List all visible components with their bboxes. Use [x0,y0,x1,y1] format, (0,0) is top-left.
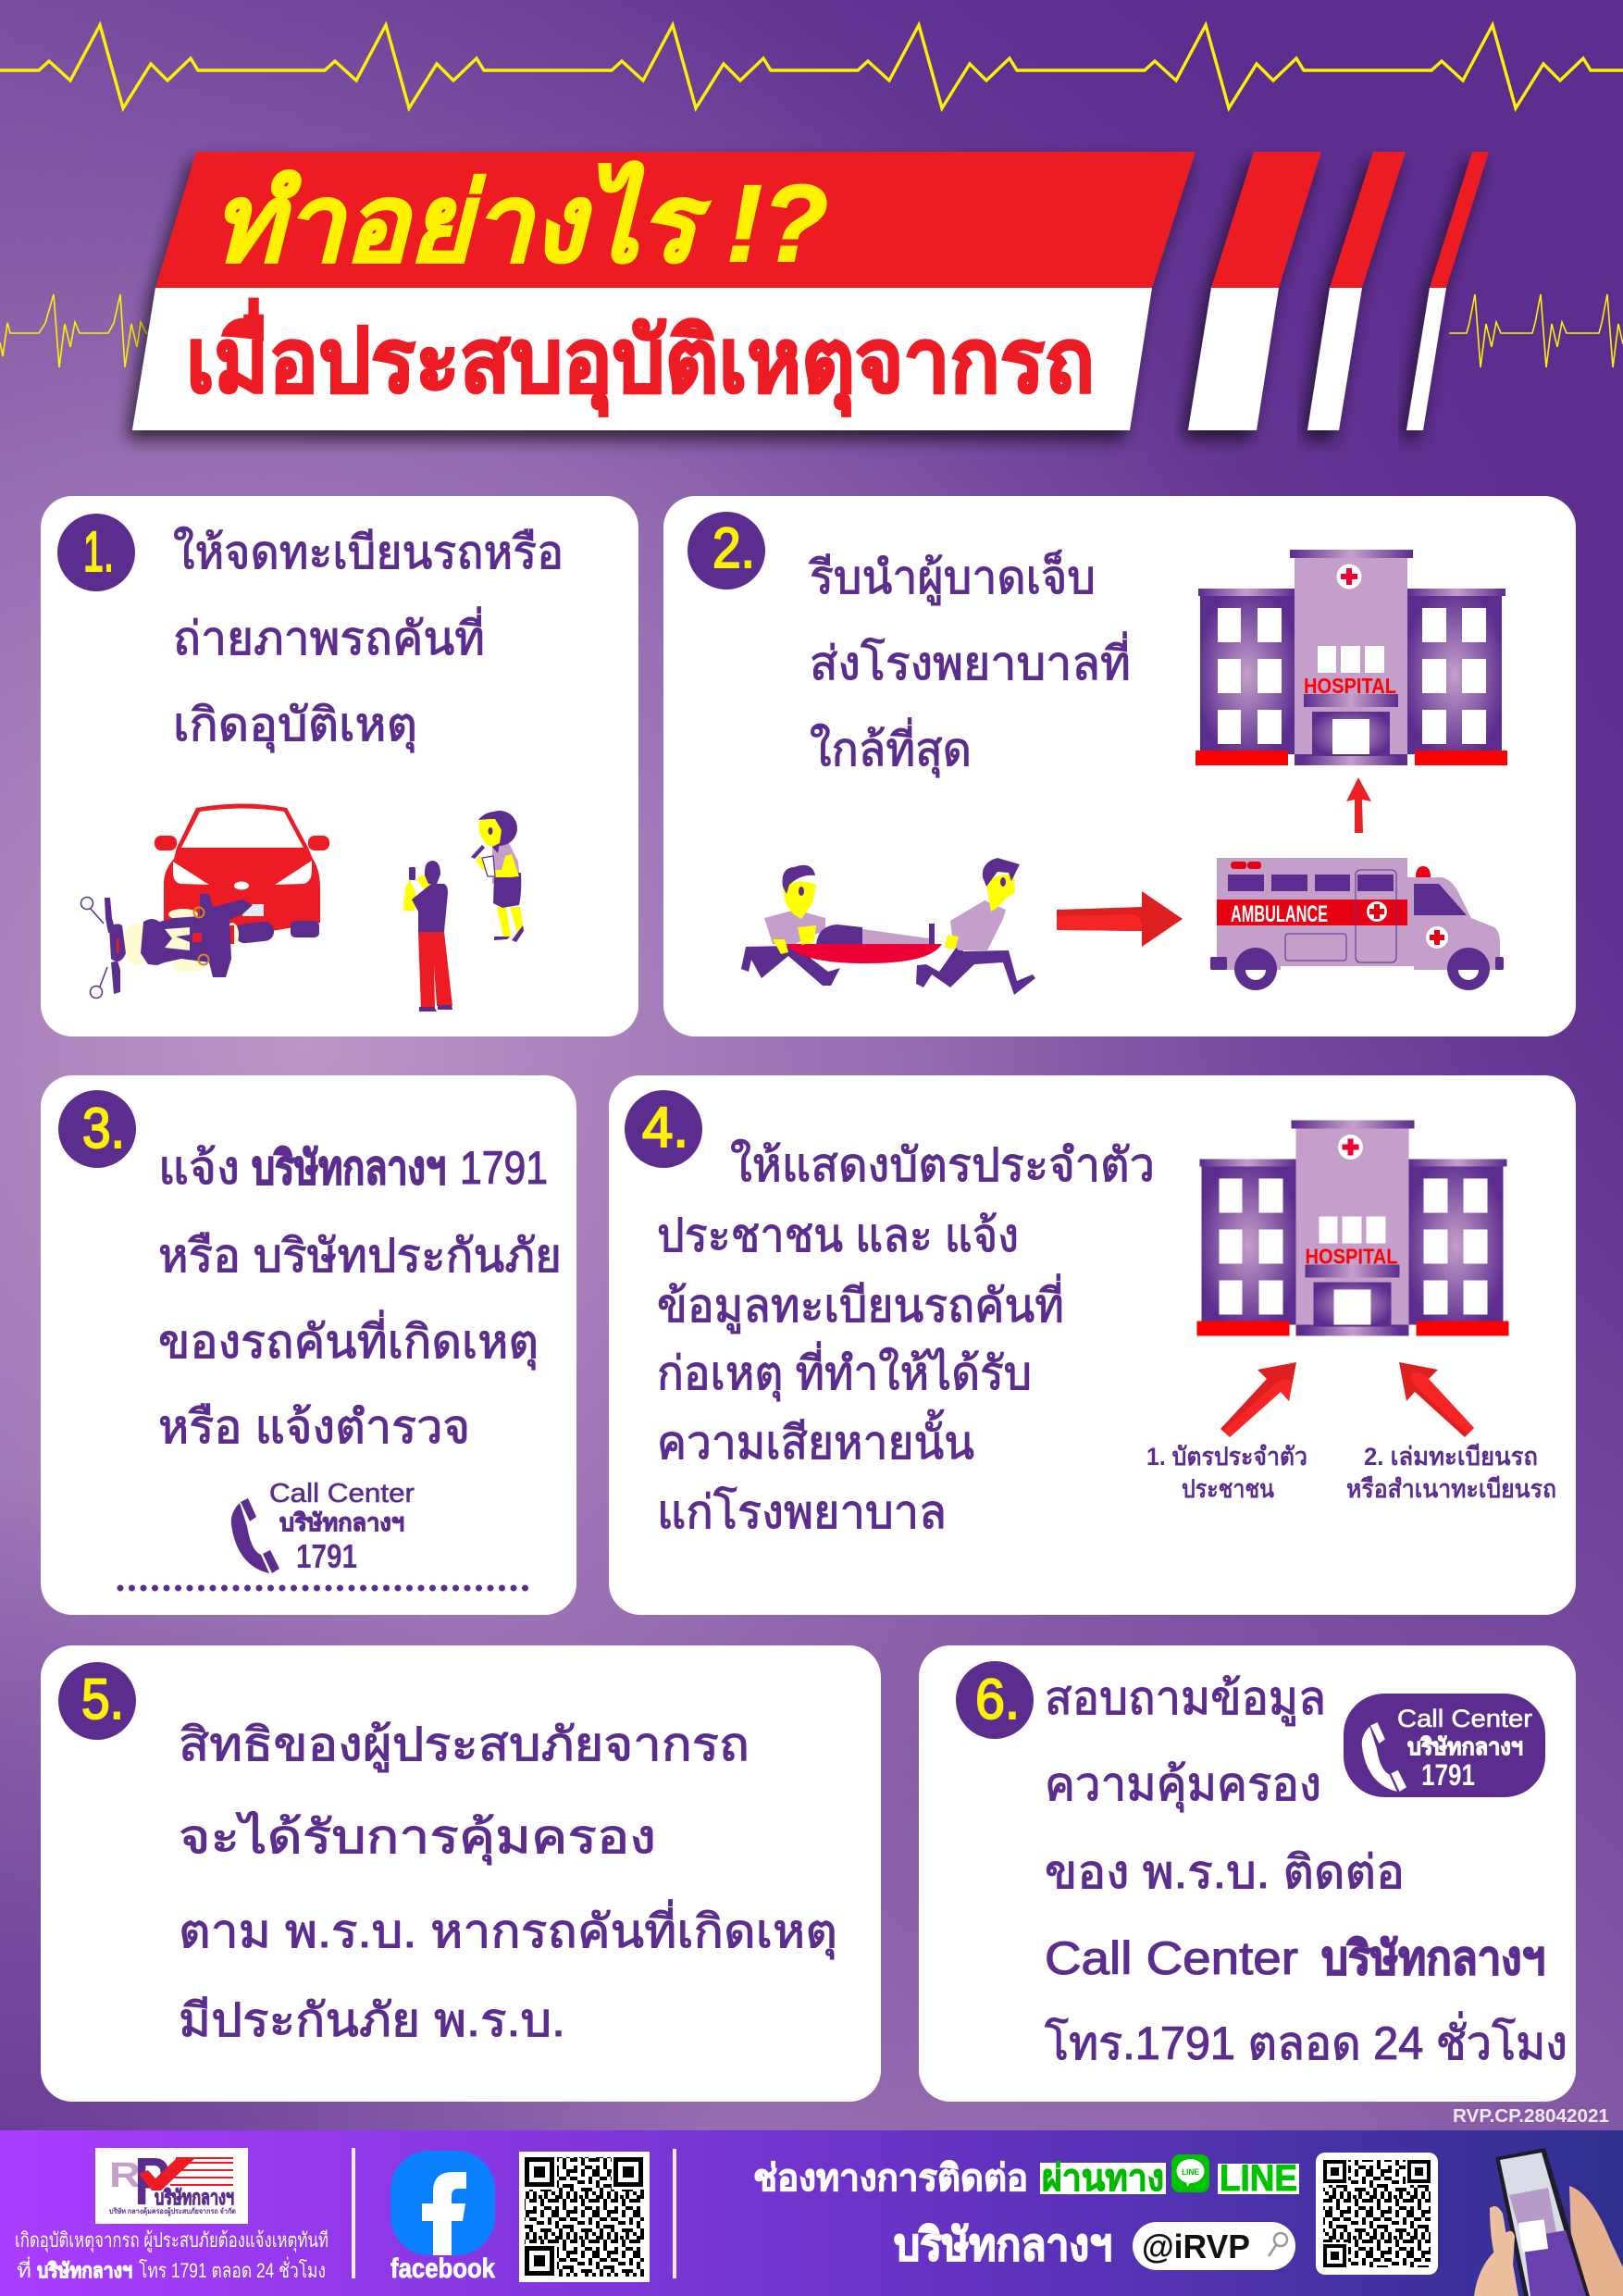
contact heading: ช่องทางการติดต่อ [753,2158,1028,2199]
icon: hospital: HOSPITAL [1304,674,1396,698]
footer note: ที่ [17,2256,31,2282]
panel 3 [41,1075,576,1615]
footer [0,2130,1623,2296]
logo: R [109,2156,141,2195]
number badge 2: 2. [712,516,755,579]
panel 2 [663,496,1576,1036]
step 2 text: รีบนำผู้บาดเจ็บ [809,550,1096,605]
step 4 text: แก่โรงพยาบาล [657,1486,947,1538]
label: id card: ประชาชน [1182,1475,1274,1503]
call center badge: บริษัทกลางฯ [1407,1734,1523,1760]
panel 5 [41,1645,881,2102]
step 4 text: ก่อเหตุ ที่ทำให้ได้รับ [657,1342,1032,1401]
icon: hospital [1196,550,1507,765]
step 2 text [809,550,1131,777]
call center contact: Call Center [269,1479,415,1508]
step 5 text: จะได้รับการคุ้มครอง [179,1811,656,1865]
banner stripe 3 [1406,152,1489,430]
step 6 text: Call Center [1045,1932,1298,1984]
step 3 text: 1791 [460,1142,548,1194]
qr code line [1316,2153,1438,2275]
number badge 4 [625,1090,702,1168]
call center badge [1344,1694,1545,1797]
step 2 text: ใกล้ที่สุด [810,718,972,777]
step 4 text: ข้อมูลทะเบียนรถคันที่ [657,1274,1064,1334]
facebook icon: facebook [390,2253,495,2284]
line label: via: ผ่านทาง [1042,2158,1164,2199]
footer note [15,2228,328,2282]
logo: P [134,2145,170,2219]
step 5 text: ตาม พ.ร.บ. หากรถคันที่เกิดเหตุ [179,1900,837,1959]
number badge 5: 5. [81,1668,124,1731]
step 4 text: ให้แสดงบัตรประจำตัว [730,1139,1155,1191]
icon: hospital: HOSPITAL [1305,1244,1397,1268]
step 1 text [173,527,564,752]
label: id card [1146,1443,1307,1503]
footer note: โทร 1791 ตลอด 24 ชั่วโมง [139,2256,326,2282]
icon: red car [155,803,329,937]
step 6 text: ของ พ.ร.บ. ติดต่อ [1045,1846,1405,1898]
number badge 6 [956,1661,1034,1739]
title line 2: เมื่อประสบอุบัติเหตุจากรถ [186,298,1095,416]
qr code facebook [519,2152,650,2282]
icon: woman with microphone [471,811,524,942]
step 3 text [158,1142,562,1453]
call center badge: Call Center [1397,1705,1532,1732]
step 4 text: ความเสียหายนั้น [657,1409,974,1469]
line label: LINE [1220,2158,1297,2199]
logo: บริษัทกลางฯ [155,2186,234,2209]
step 3 text: แจ้ง [158,1142,240,1194]
call center contact [231,1479,415,1575]
icon: fallen motorcycle [81,894,275,998]
arrow left [1220,1362,1296,1437]
step 6 text: ความคุ้มครอง [1045,1758,1321,1812]
step 4 text [657,1139,1155,1538]
label: registration book: หรือสำเนาทะเบียนรถ [1346,1475,1556,1503]
heartbeat line top [0,25,1623,108]
step 3 text: หรือ บริษัทประกันภัย [158,1230,562,1282]
logo [95,2145,248,2224]
step 5 text [179,1719,837,2046]
icon: paramedics carrying stretcher [741,858,1035,995]
icon: man taking photo [403,861,452,1011]
step 4 text: ประชาชน และ แจ้ง [657,1210,1019,1261]
number badge 6: 6. [975,1668,1020,1731]
panel 1 [41,496,638,1036]
panel 6 [919,1645,1576,2102]
call center contact: บริษัทกลางฯ [279,1508,404,1536]
panel 4 [609,1075,1576,1615]
title line 1: ทำอย่างไร !? [212,161,828,285]
step 1 text: เกิดอุบัติเหตุ [173,699,417,752]
icon: phone [231,1498,279,1573]
document code: RVP.CP.28042021 [1453,2106,1609,2127]
step 5 text: มีประกันภัย พ.ร.บ. [179,1994,565,2046]
step 2 text: ส่งโรงพยาบาลที่ [810,632,1131,689]
icon: line: LINE [1182,2167,1199,2177]
line id pill: @iRVP [1142,2228,1250,2265]
number badge 2 [688,512,765,590]
line id pill [1133,2222,1295,2270]
heartbeat line left [0,294,155,367]
step 5 text: สิทธิของผู้ประสบภัยจากรถ [179,1719,750,1772]
number badge 3 [58,1090,136,1168]
company name: บริษัทกลางฯ [894,2221,1112,2270]
logo: บริษัท กลางคุ้มครองผู้ประสบภัยจากรถ จำกัด [109,2206,236,2216]
banner stripe 1 [1188,152,1321,430]
icon: hospital [1197,1120,1508,1336]
banner stripe 2 [1307,152,1406,430]
icon: phone [1362,1722,1406,1792]
dotted line [120,1584,526,1592]
call center contact: 1791 [296,1537,357,1575]
step 3 text: หรือ แจ้งตำรวจ [158,1401,470,1453]
icon: ambulance: AMBULANCE [1231,901,1328,927]
step 6 text: โทร.1791 ตลอด 24 ชั่วโมง [1045,2012,1567,2069]
step 6 text: บริษัทกลางฯ [1321,1932,1545,1984]
footer note: เกิดอุบัติเหตุจากรถ ผู้ประสบภัยต้องแจ้งเหตุทันที [15,2228,328,2253]
number badge 4: 4. [642,1096,688,1159]
arrow right [1399,1362,1474,1437]
number badge 3: 3. [82,1097,125,1160]
label: registration book [1346,1443,1556,1503]
number badge 5 [58,1662,136,1740]
step 1 text: ถ่ายภาพรถคันที่ [173,607,485,664]
number badge 1: 1. [83,520,114,583]
step 3 text: บริษัทกลางฯ [252,1142,446,1194]
call center badge: 1791 [1421,1758,1475,1792]
title banner [132,152,1489,430]
step 3 text: ของรถคันที่เกิดเหตุ [158,1310,539,1370]
arrow right to ambulance [1057,891,1183,947]
step 1 text: ให้จดทะเบียนรถหรือ [173,527,564,578]
number badge 1 [57,514,135,591]
arrow up to hospital [1346,777,1371,833]
facebook icon [390,2151,495,2284]
step 6 text: สอบถามข้อมูล [1045,1672,1326,1726]
icon: line [1171,2154,1209,2192]
hand holding phone [1474,2148,1623,2296]
icon: search [1269,2233,1287,2256]
label: id card: 1. บัตรประจำตัว [1146,1443,1307,1471]
heartbeat line right [1449,294,1623,367]
banner main shape [132,152,1196,430]
step 6 text [1045,1672,1567,2069]
footer note: บริษัทกลางฯ [37,2259,132,2282]
icon: ambulance [1210,858,1504,990]
label: registration book: 2. เล่มทะเบียนรถ [1364,1443,1538,1471]
